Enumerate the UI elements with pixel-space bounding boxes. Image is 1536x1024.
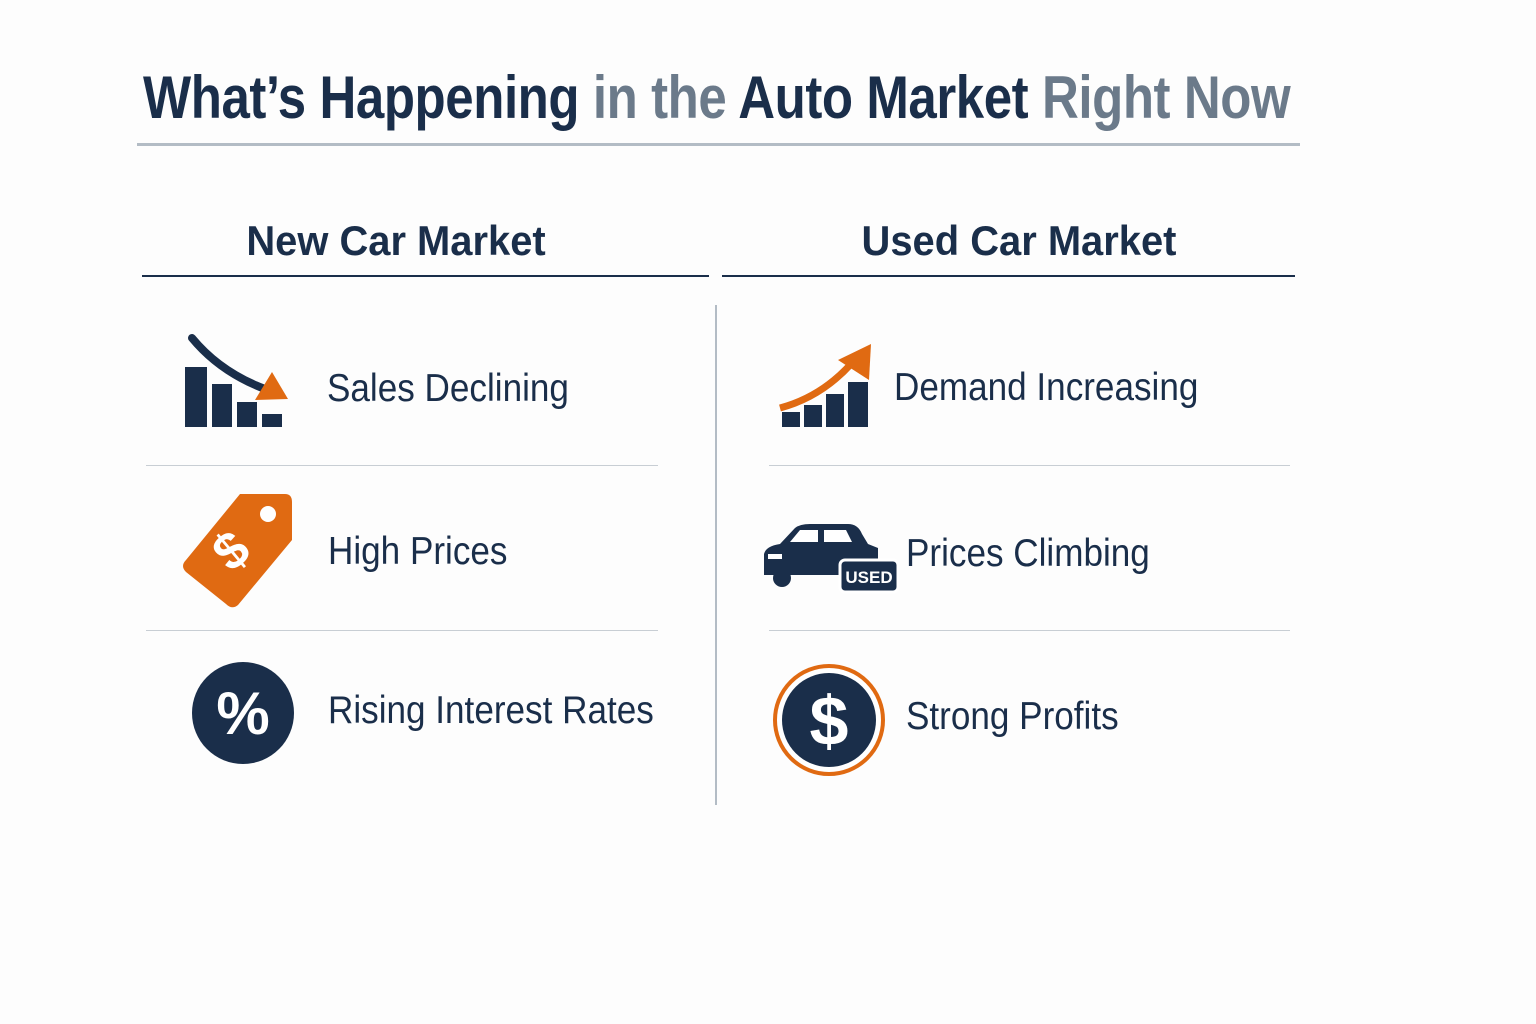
title: What’s Happening in the Auto Market Right Now <box>143 64 1290 131</box>
icon: sales declining chart <box>185 334 288 427</box>
text: sales declining: Sales Declining <box>327 367 569 410</box>
icon: dollar coin <box>773 664 885 776</box>
icon: used car <box>764 524 896 590</box>
heading: new car market: New Car Market <box>246 217 546 264</box>
text: demand increasing: Demand Increasing <box>894 366 1198 409</box>
icon: percent <box>192 662 294 764</box>
text: prices climbing: Prices Climbing <box>906 532 1150 575</box>
text: high prices: High Prices <box>328 530 507 573</box>
icon: demand increasing chart <box>779 344 871 427</box>
text: strong profits: Strong Profits <box>906 695 1119 738</box>
icon: percent: % <box>216 680 270 747</box>
icon: price tag <box>183 494 292 608</box>
heading: used car market: Used Car Market <box>862 217 1176 264</box>
text: rising interest rates: Rising Interest Rates <box>328 689 654 732</box>
icon: used car: USED <box>845 568 893 587</box>
icon: price tag: $ <box>202 520 261 583</box>
icon: dollar coin: $ <box>810 682 848 760</box>
